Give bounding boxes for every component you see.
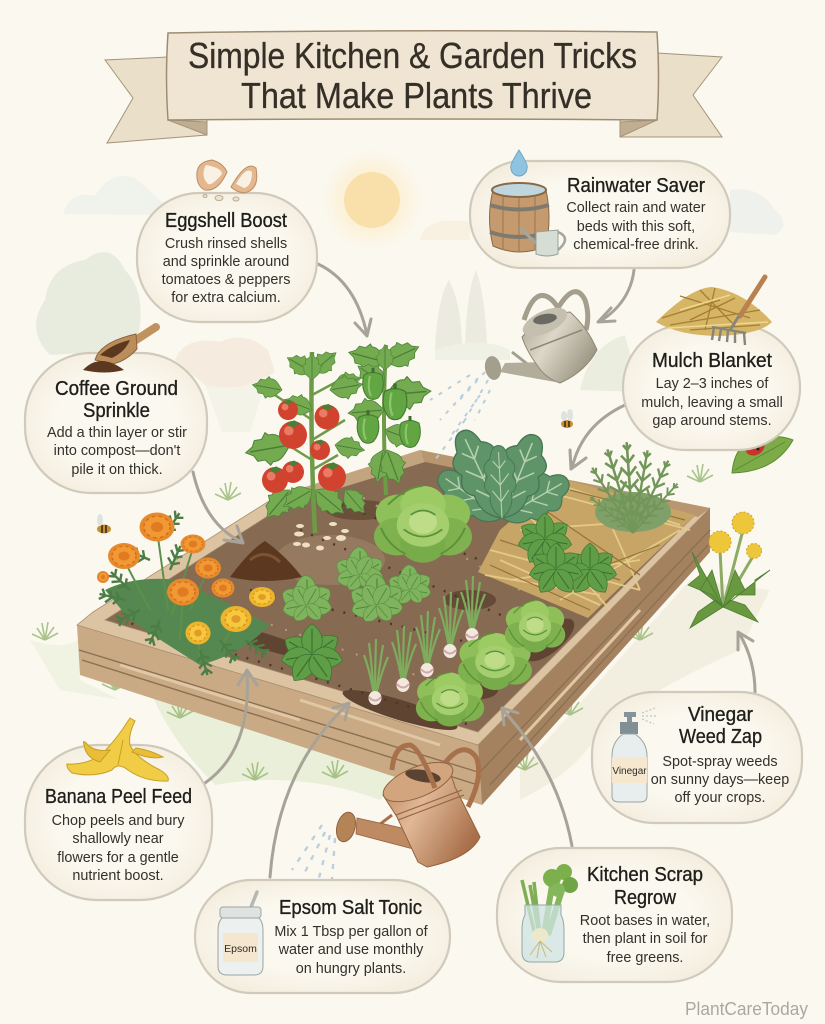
callout: banana peel feed: nutrient boost.: [72, 868, 164, 884]
callout: banana peel feed: flowers for a gentle: [57, 850, 179, 866]
pepper plant: [345, 335, 432, 495]
callout: coffee ground sprinkle: Add a thin layer or stir: [47, 425, 187, 441]
callout: epsom salt tonic: [195, 880, 450, 993]
callout: eggshell boost: Crush rinsed shells: [165, 236, 287, 252]
silver watering can: [430, 292, 597, 460]
icon: eggshells: [197, 160, 257, 201]
marigold patch: [97, 509, 275, 676]
icon: epsom jar: [218, 892, 263, 975]
dandelion: [688, 512, 770, 628]
bees: [97, 409, 573, 534]
callout: coffee ground sprinkle: into compost—don't: [54, 443, 180, 459]
title banner: [105, 31, 722, 143]
callout: rainwater saver: Rainwater Saver: [567, 175, 705, 197]
background scenery: [30, 142, 784, 800]
callout: mulch blanket: gap around stems.: [652, 413, 772, 429]
raised garden bed: [77, 450, 710, 805]
callout: kitchen scrap regrow: Root bases in water,: [580, 913, 710, 929]
callout: epsom salt tonic: Mix 1 Tbsp per gallon of: [274, 924, 429, 940]
callout: rainwater saver: Collect rain and water: [566, 200, 706, 216]
callout: mulch blanket: [623, 277, 800, 450]
basil on mulch: [517, 513, 618, 597]
kale: [428, 422, 578, 536]
callout: coffee ground sprinkle: Coffee Ground: [55, 378, 178, 400]
title: [188, 35, 637, 116]
callout: eggshell boost: and sprinkle around: [163, 254, 289, 270]
callout: coffee ground sprinkle: pile it on thick.: [71, 462, 163, 478]
icon: vinegar spray bottle: [612, 708, 656, 802]
callout: kitchen scrap regrow: Kitchen Scrap: [587, 864, 703, 886]
callout: kitchen scrap regrow: Regrow: [614, 887, 676, 909]
salad greens: [278, 547, 433, 686]
callout: eggshell boost: for extra calcium.: [171, 290, 281, 306]
callout: mulch blanket: Mulch Blanket: [652, 350, 772, 372]
icon: epsom jar: Epsom: [224, 943, 257, 955]
onions: [364, 576, 485, 705]
tomato plant: [243, 344, 373, 533]
copper watering can: [292, 745, 480, 882]
callout: banana peel feed: Banana Peel Feed: [45, 786, 192, 808]
icon: scoop of coffee grounds: [83, 327, 156, 372]
icon: straw mulch and rake: [656, 277, 772, 345]
watermark: PlantCareToday: [685, 999, 808, 1019]
callout: mulch blanket: Lay 2–3 inches of: [656, 376, 769, 392]
callout: banana peel feed: [25, 718, 212, 900]
mulch layer: [478, 478, 695, 618]
title: Simple Kitchen & Garden Tricks: [188, 35, 637, 76]
icon: banana peel: [67, 718, 168, 781]
arrow: vinegar to dandelion: [738, 632, 755, 692]
callout: epsom salt tonic: Epsom Salt Tonic: [279, 897, 422, 919]
icon: vinegar spray bottle: Vinegar: [612, 766, 647, 777]
callout: vinegar weed zap: Spot-spray weeds: [662, 754, 778, 770]
large lettuce: [374, 486, 472, 563]
callout: rainwater saver: chemical-free drink.: [573, 237, 699, 253]
callout: kitchen scrap regrow: [497, 848, 732, 982]
arrow: kitchen scrap to lettuce: [502, 708, 572, 846]
callout: banana peel feed: Chop peels and bury: [52, 813, 185, 829]
arrow: banana to flowers: [205, 670, 257, 783]
callout: rainwater saver: [470, 150, 730, 268]
callout: kitchen scrap regrow: free greens.: [607, 950, 683, 966]
callout: kitchen scrap regrow: then plant in soil for: [583, 931, 708, 947]
compost pile and egg shell bits: [230, 522, 349, 581]
callout: banana peel feed: shallowly near: [72, 831, 164, 847]
callout: vinegar weed zap: off your crops.: [675, 790, 765, 806]
callout: rainwater saver: beds with this soft,: [577, 219, 695, 235]
callout: vinegar weed zap: Vinegar: [688, 704, 753, 726]
callout: vinegar weed zap: on sunny days—keep: [651, 772, 789, 788]
icon: water drop: [511, 150, 527, 176]
icon: jar with regrowing scraps: [522, 864, 578, 962]
callout: epsom salt tonic: water and use monthly: [278, 942, 424, 958]
icon: rain barrel and small can: [490, 183, 565, 256]
callout: mulch blanket: mulch, leaving a small: [641, 395, 783, 411]
callout: coffee ground sprinkle: Sprinkle: [83, 400, 150, 422]
ladybug on leaf: [732, 435, 793, 473]
small lettuces: [416, 601, 565, 727]
callout: epsom salt tonic: on hungry plants.: [296, 961, 406, 977]
arrow: eggshell to plants: [318, 264, 371, 336]
callout: eggshell boost: tomatoes & peppers: [162, 272, 290, 288]
arrow: mulch to bed: [570, 405, 625, 469]
callout: coffee ground sprinkle: [25, 327, 207, 493]
callout: eggshell boost: [137, 160, 317, 322]
arrow: epsom to onions: [270, 703, 349, 877]
arrow: coffee to compost: [193, 472, 243, 543]
callout: vinegar weed zap: [592, 692, 802, 823]
callout: vinegar weed zap: Weed Zap: [679, 726, 762, 748]
arrow: rainwater to can: [598, 270, 634, 322]
title: That Make Plants Thrive: [241, 75, 592, 116]
callout: eggshell boost: Eggshell Boost: [165, 210, 287, 232]
herb bush: [586, 442, 682, 537]
